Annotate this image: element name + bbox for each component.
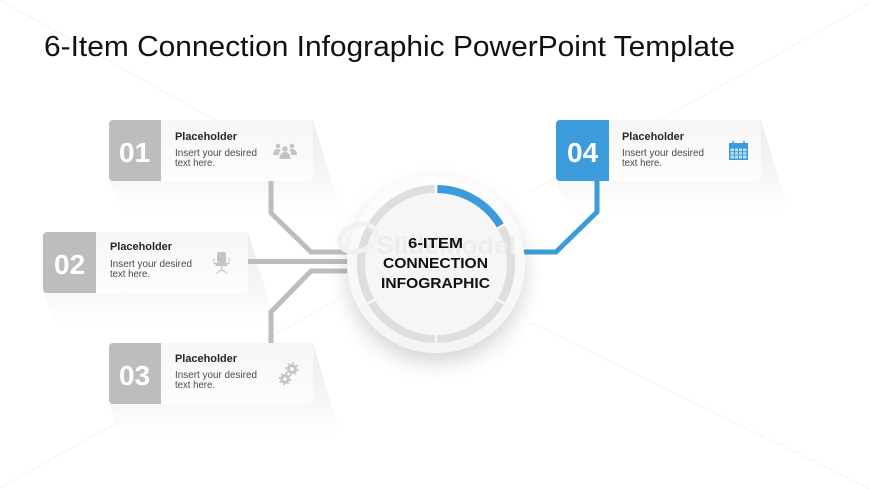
watermark: SlideModel (376, 232, 516, 260)
icon: people (273, 144, 297, 159)
icon: gears (280, 363, 298, 384)
hub label: 6-ITEM (408, 235, 463, 252)
title: 6-Item Connection Infographic PowerPoint Template (44, 31, 735, 63)
card 04 (556, 120, 761, 181)
card 03: Insert your desired (175, 369, 257, 381)
card 01 (109, 120, 313, 181)
connector: card 04 to hub (520, 181, 597, 252)
card 02: 02 (54, 249, 85, 280)
connector: card 03 to hub (271, 271, 348, 343)
card shadows (43, 120, 789, 436)
card 03: 03 (119, 360, 150, 391)
hub ring: blue active segment (437, 189, 500, 225)
card 02: text here. (110, 268, 150, 280)
card 03 (109, 343, 313, 404)
card 03: Placeholder (175, 353, 238, 365)
connector: card 01 to hub (271, 181, 348, 252)
card 02: Placeholder (110, 241, 173, 253)
card 04: Insert your desired (622, 147, 704, 159)
hub ring: grey segments (361, 189, 511, 339)
watermark (336, 219, 516, 260)
card 01: Placeholder (175, 131, 238, 143)
card 01: text here. (175, 157, 215, 169)
card 04: Placeholder (622, 131, 685, 143)
connector: card 02 to hub (248, 259, 348, 264)
hub: central circle (336, 175, 525, 353)
icon: office chair (214, 252, 230, 274)
card 01: Insert your desired (175, 147, 257, 159)
hub label: INFOGRAPHIC (381, 275, 490, 292)
card 03: text here. (175, 379, 215, 391)
card 04: 04 (567, 137, 599, 168)
hub label (381, 235, 490, 292)
card 02: Insert your desired (110, 258, 192, 270)
card 04: text here. (622, 157, 662, 169)
icon: calendar (729, 141, 748, 160)
card 01: 01 (119, 137, 150, 168)
hub label: CONNECTION (383, 255, 488, 272)
card 02 (43, 232, 248, 293)
